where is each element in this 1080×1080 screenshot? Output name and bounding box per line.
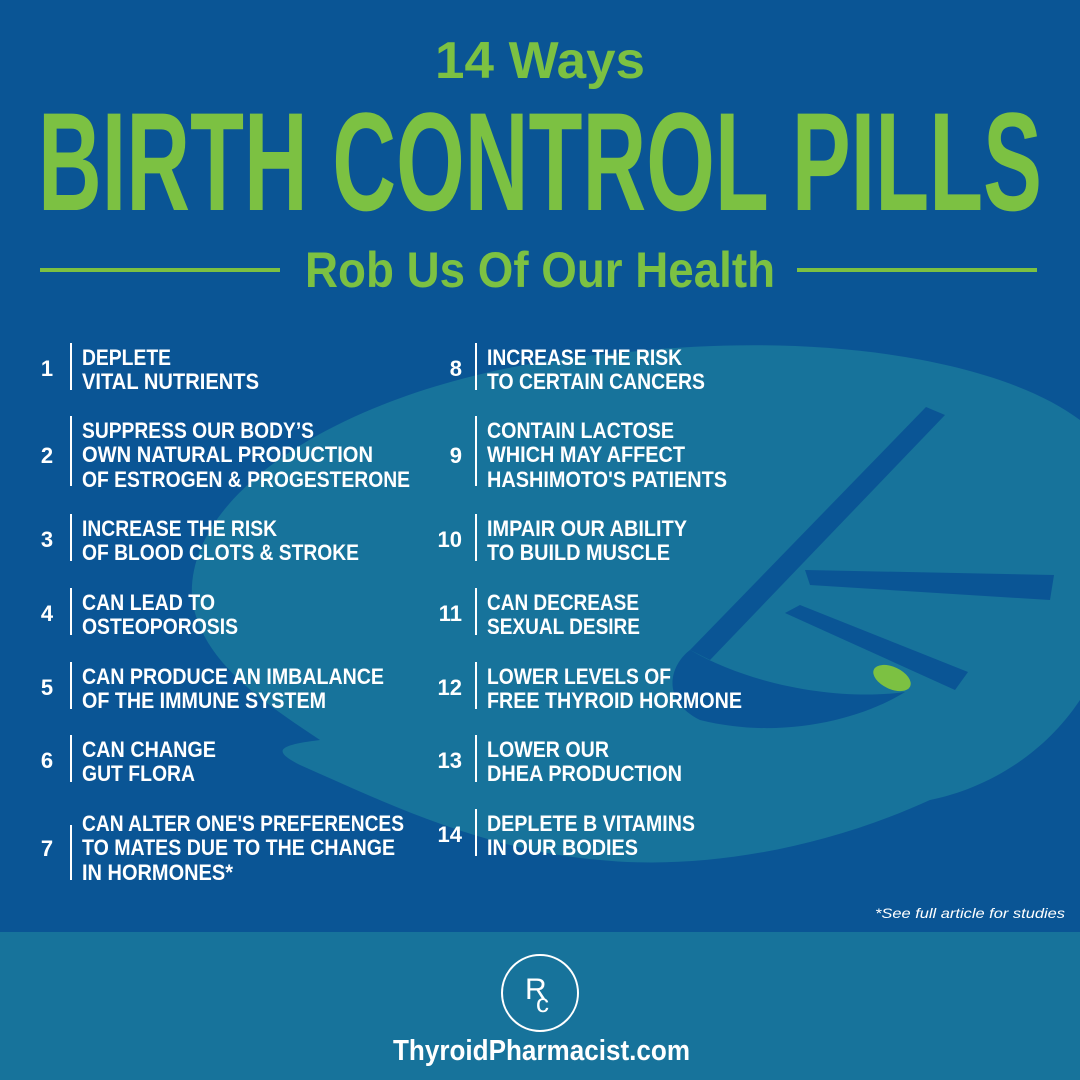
item 3: OF BLOOD CLOTS & STROKE — [82, 540, 359, 565]
item 7 — [41, 811, 404, 885]
background hand illustration — [192, 345, 1080, 862]
item 12 — [438, 662, 742, 713]
item 13: 13 — [438, 748, 462, 773]
item 3: 3 — [41, 527, 53, 552]
item 5: CAN PRODUCE AN IMBALANCE — [82, 664, 384, 689]
item 11: 11 — [439, 601, 462, 626]
item 1: DEPLETE — [82, 345, 171, 370]
subtitle: Rob Us Of Our Health: Rob Us Of Our Health — [305, 242, 775, 298]
item 2: 2 — [41, 443, 53, 468]
item 8: 8 — [450, 356, 462, 381]
item 10: 10 — [438, 527, 462, 552]
item 8 — [450, 343, 705, 394]
item 12: LOWER LEVELS OF — [487, 664, 671, 689]
item 11: SEXUAL DESIRE — [487, 614, 640, 639]
header — [38, 32, 1042, 298]
item 2 — [41, 416, 410, 492]
item 2: SUPPRESS OUR BODY’S — [82, 418, 314, 443]
item 9 — [450, 416, 727, 492]
website: ThyroidPharmacist.com — [393, 1035, 690, 1067]
item 14: DEPLETE B VITAMINS — [487, 811, 695, 836]
item 6 — [41, 735, 216, 786]
icon: RC logo — [502, 955, 578, 1031]
item 1: 1 — [41, 356, 53, 381]
item 6: GUT FLORA — [82, 761, 195, 786]
item 9: CONTAIN LACTOSE — [487, 418, 674, 443]
item 11: CAN DECREASE — [487, 590, 639, 615]
item 7: IN HORMONES* — [82, 860, 233, 885]
item 6: CAN CHANGE — [82, 737, 216, 762]
list: left column — [41, 343, 410, 885]
item 10: TO BUILD MUSCLE — [487, 540, 670, 565]
item 9: HASHIMOTO'S PATIENTS — [487, 467, 727, 492]
item 9: 9 — [450, 443, 462, 468]
item 3: INCREASE THE RISK — [82, 516, 277, 541]
item 4: CAN LEAD TO — [82, 590, 215, 615]
item 5: OF THE IMMUNE SYSTEM — [82, 688, 326, 713]
item 14 — [438, 809, 695, 860]
footnote: *See full article for studies — [875, 905, 1065, 921]
item 10 — [438, 514, 687, 565]
item 4 — [41, 588, 238, 639]
item 5 — [41, 662, 384, 713]
icon: RC logo: c — [536, 988, 549, 1018]
item 12: 12 — [438, 675, 462, 700]
item 1: VITAL NUTRIENTS — [82, 369, 259, 394]
item 3 — [41, 514, 359, 565]
item 14: IN OUR BODIES — [487, 835, 638, 860]
item 6: 6 — [41, 748, 53, 773]
footer band — [0, 932, 1080, 1080]
item 11 — [439, 588, 640, 639]
item 5: 5 — [41, 675, 53, 700]
item 1 — [41, 343, 259, 394]
item 4: OSTEOPOROSIS — [82, 614, 238, 639]
item 14: 14 — [438, 822, 463, 847]
item 8: INCREASE THE RISK — [487, 345, 682, 370]
item 4: 4 — [41, 601, 54, 626]
subtitle top: 14 Ways: 14 Ways — [435, 32, 645, 90]
item 12: FREE THYROID HORMONE — [487, 688, 742, 713]
item 10: IMPAIR OUR ABILITY — [487, 516, 687, 541]
icon: RC logo: R — [525, 973, 547, 1006]
item 13: DHEA PRODUCTION — [487, 761, 682, 786]
item 7: TO MATES DUE TO THE CHANGE — [82, 835, 395, 860]
item 9: WHICH MAY AFFECT — [487, 442, 686, 467]
item 13: LOWER OUR — [487, 737, 609, 762]
item 8: TO CERTAIN CANCERS — [487, 369, 705, 394]
item 2: OWN NATURAL PRODUCTION — [82, 442, 373, 467]
icon: green pill — [869, 660, 915, 696]
item 2: OF ESTROGEN & PROGESTERONE — [82, 467, 410, 492]
item 7: CAN ALTER ONE'S PREFERENCES — [82, 811, 404, 836]
item 7: 7 — [41, 836, 53, 861]
list: right column — [438, 343, 742, 860]
item 13 — [438, 735, 682, 786]
